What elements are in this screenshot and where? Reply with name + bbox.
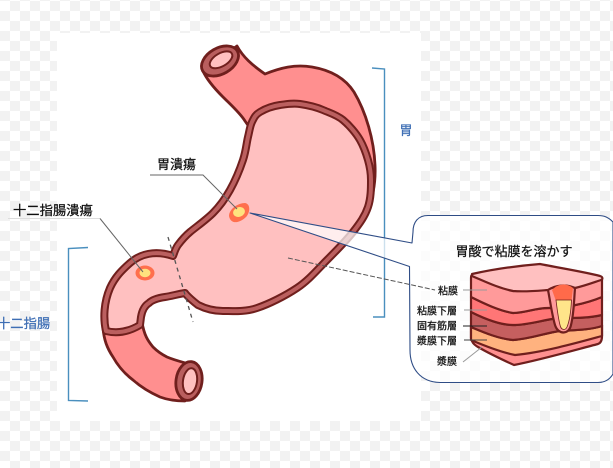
speech bubble with cross-section [250,213,613,382]
fundus and esophagus [203,46,375,215]
layer: submucosa [471,297,602,325]
duodenum tube opening [173,360,205,402]
layer label: serosa: 漿膜 [437,355,457,368]
layer label: mucosa: 粘膜 [438,284,458,298]
bracket: stomach [372,68,384,317]
layer label: subserosa [417,334,487,348]
layer label: subserosa: 漿膜下層 [417,334,457,348]
bubble title: 胃酸で粘膜を溶かす [455,244,573,259]
label: stomach: 胃 [399,123,413,138]
tissue block [471,264,602,365]
layer: muscularis [471,312,602,340]
duodenum tube [103,322,189,401]
label: duodenal ulcer [8,203,143,272]
layer label: muscularis: 固有筋層 [417,320,457,332]
layer label: submucosa [417,304,487,318]
dashed leader to mucosa [288,258,435,290]
esophagus opening [196,40,244,82]
duodenal ulcer [136,266,154,280]
stomach and duodenum illustration [103,40,375,402]
stomach ulcer [229,203,249,222]
layer label: submucosa: 粘膜下層 [417,304,457,318]
layer label: serosa [437,347,482,368]
ulcer notch [548,286,575,332]
top surface [472,264,602,291]
layer: serosa [471,325,602,365]
label: gastric ulcer [150,157,237,209]
pylorus dashed boundary [168,237,193,322]
layer label: mucosa [438,284,487,298]
notch inner erosion [552,284,573,329]
label: gastric ulcer: 胃潰瘍 [157,157,196,172]
bubble outline [250,213,613,382]
stomach body and duodenal bulb [104,104,371,332]
layer: mucosa [471,275,602,313]
bracket: duodenum [68,248,88,401]
layer label: muscularis [417,320,487,332]
layer: subserosa [471,326,602,355]
label: duodenal ulcer: 十二指腸潰瘍 [13,203,93,218]
